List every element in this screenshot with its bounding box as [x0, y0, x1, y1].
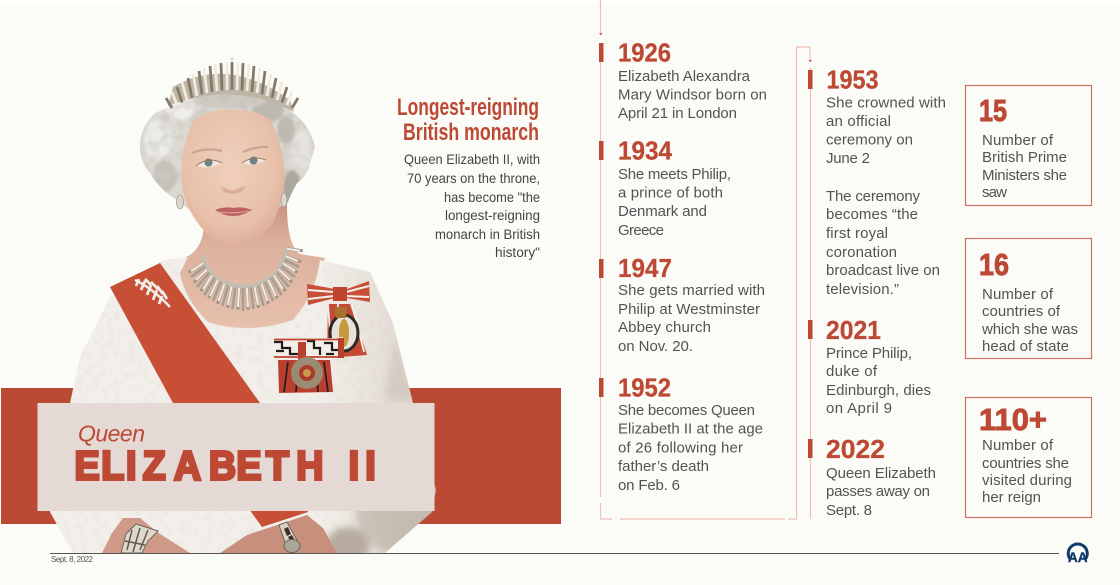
timeline 1952: on Feb. 6 — [618, 477, 680, 494]
intro text: monarch in British — [435, 226, 540, 242]
timeline 1947 — [599, 253, 765, 355]
red banner — [1, 388, 561, 524]
intro text: Queen Elizabeth II, with — [404, 151, 540, 167]
timeline 1953: The ceremony — [826, 188, 920, 205]
timeline 1952: of 26 following her — [618, 440, 743, 456]
timeline 2022: passes away on — [826, 483, 930, 500]
timeline 1926: April 21 in London — [618, 105, 737, 122]
footer rule — [50, 553, 1059, 554]
stat box: 16: 16 — [979, 247, 1009, 282]
timeline 1934: 1934 — [618, 136, 673, 166]
face — [181, 110, 285, 247]
stat box: 15: Number of — [982, 132, 1054, 149]
title: Queen: Queen — [78, 420, 145, 446]
intro text: 70 years on the throne, — [407, 170, 540, 186]
dress — [45, 255, 445, 563]
timeline 1947: on Nov. 20. — [618, 338, 693, 355]
hair — [140, 94, 315, 210]
bow with order pendant — [307, 281, 370, 358]
heading: longest-reigning monarch: Longest-reigning — [397, 94, 539, 121]
timeline 1947: Philip at Westminster — [618, 301, 760, 318]
timeline 1953: ceremony on — [826, 132, 913, 148]
timeline 1947: She gets married with — [618, 282, 765, 299]
timeline 1926: 1926 — [618, 38, 671, 68]
icon: AA logo: AA — [1068, 549, 1088, 565]
sash — [110, 263, 308, 527]
stat box: 15: 15 — [979, 93, 1007, 128]
timeline 1953: broadcast live on — [826, 262, 940, 279]
timeline 2022: 2022 — [826, 434, 885, 464]
necklace — [189, 249, 303, 311]
intro text: has become "the — [444, 189, 540, 205]
timeline 2022 — [808, 434, 936, 519]
date: Sept. 8, 2022 — [51, 555, 94, 564]
timeline 2021: Prince Philip, — [826, 345, 912, 362]
timeline 1952: She becomes Queen — [618, 402, 755, 419]
stat box: 16: countries of — [982, 303, 1061, 320]
stat box: 16: which she was — [981, 321, 1078, 338]
timeline 1947: 1947 — [618, 253, 672, 283]
intro text: longest-reigning — [445, 207, 540, 223]
timeline 1926: Mary Windsor born on — [618, 86, 767, 104]
stat box: 15: saw — [982, 184, 1007, 201]
zigzag order — [272, 337, 344, 393]
timeline 2022: Sept. 8 — [826, 502, 872, 519]
timeline 1953 — [808, 64, 946, 298]
timeline 1953: coronation — [826, 244, 897, 261]
stat box: 15 — [966, 86, 1092, 206]
timeline 2021 — [808, 315, 931, 417]
timeline 2021: duke of — [826, 363, 878, 380]
portrait of Queen Elizabeth II — [45, 57, 445, 563]
timeline 2021: Edinburgh, dies — [826, 382, 931, 399]
eyebrows, eyes, nose, mouth — [192, 147, 268, 216]
timeline 1947: Abbey church — [618, 319, 711, 336]
intro text — [404, 151, 540, 260]
earrings — [176, 193, 287, 209]
stat box: 110+: Number of — [982, 437, 1054, 454]
stat box: 16: head of state — [982, 338, 1069, 355]
stat box: 15: Ministers she — [982, 167, 1067, 184]
timeline 1934: She meets Philip, — [618, 166, 731, 183]
timeline 2022: Queen Elizabeth — [826, 465, 936, 482]
timeline 1953: an official — [826, 113, 891, 130]
stat box: 110+: her reign — [982, 489, 1041, 506]
stat box: 16 — [966, 238, 1092, 358]
timeline 1926 — [599, 38, 767, 122]
timeline 1953: June 2 — [826, 150, 870, 167]
title: ELIZABETH II: ELIZABETH II — [75, 443, 376, 489]
stat box: 110+: visited during — [982, 472, 1072, 489]
timeline 1952: father’s death — [618, 458, 709, 475]
timeline 2021: 2021 — [826, 315, 881, 345]
timeline 1953: 1953 — [826, 64, 878, 94]
heading: longest-reigning monarch: British monarch — [403, 119, 539, 146]
timeline 1934: Denmark and — [618, 203, 707, 220]
stat box: 110+: countries she — [982, 455, 1069, 472]
heading: longest-reigning monarch — [397, 94, 539, 146]
timeline 1952 — [599, 372, 763, 494]
hands and bracelets — [102, 515, 337, 553]
timeline connector lines — [599, 0, 812, 519]
timeline 1953: television.” — [826, 281, 899, 298]
timeline 1934: a prince of both — [618, 184, 723, 202]
timeline 1953: She crowned with — [826, 94, 946, 112]
stat box: 110+ — [966, 398, 1092, 518]
timeline 1934 — [599, 136, 731, 239]
timeline 1952: Elizabeth II at the age — [618, 420, 763, 438]
timeline 2021: on April 9 — [826, 400, 892, 417]
intro text: history" — [495, 244, 540, 260]
title panel — [38, 403, 434, 511]
timeline 1926: Elizabeth Alexandra — [618, 68, 751, 85]
fern brooch — [135, 279, 170, 307]
timeline 1952: 1952 — [618, 372, 671, 402]
timeline 1934: Greece — [618, 222, 664, 239]
stat box: 15: British Prime — [982, 149, 1067, 166]
stat box: 16: Number of — [982, 286, 1054, 303]
stat box: 110+: 110+ — [979, 402, 1047, 437]
timeline 1953: becomes “the — [826, 206, 918, 223]
timeline 1953: first royal — [826, 225, 888, 242]
neck and chest — [175, 205, 325, 332]
tiara — [166, 57, 298, 112]
